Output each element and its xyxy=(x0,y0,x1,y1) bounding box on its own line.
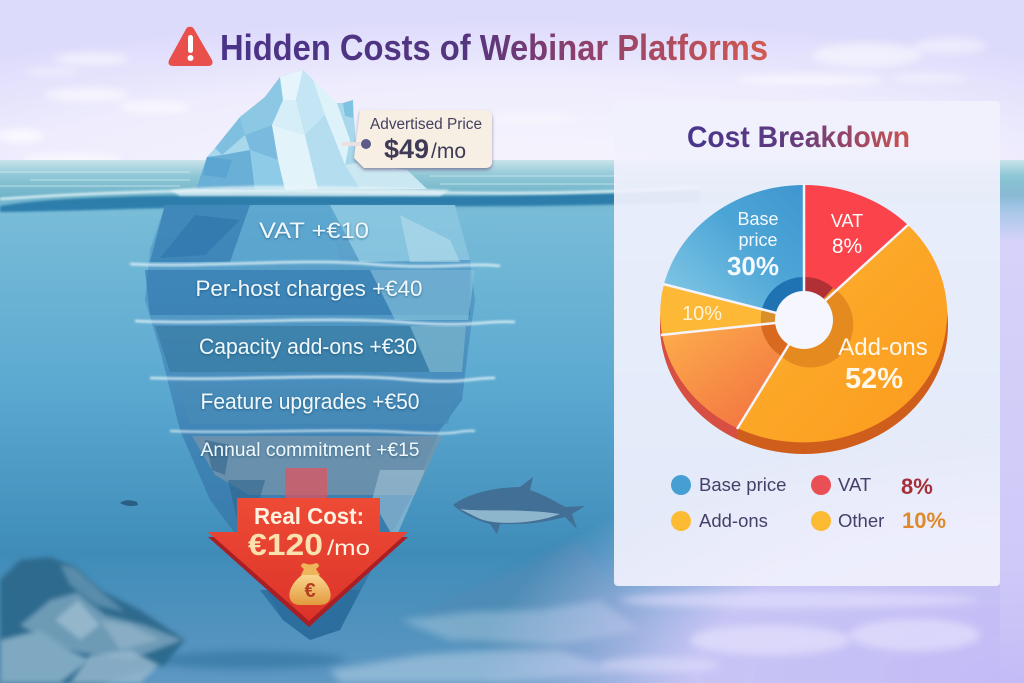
slice label: other: 10% xyxy=(682,303,722,325)
slice label: VAT xyxy=(831,211,863,258)
slice dividers xyxy=(661,184,909,429)
small fish xyxy=(120,500,138,506)
legend item: other xyxy=(811,510,884,531)
legend xyxy=(671,474,946,533)
slice: base price xyxy=(664,185,804,320)
slice label: add-ons: Add-ons xyxy=(838,334,928,361)
slice label: add-ons: 52% xyxy=(845,363,903,395)
slice label: VAT: 8% xyxy=(832,235,862,258)
layer: feature upgrades: Feature upgrades +€50 xyxy=(200,389,420,414)
slice label: VAT: VAT xyxy=(831,211,863,231)
background: sea xyxy=(0,160,1024,683)
pie chart xyxy=(660,184,948,454)
price tag xyxy=(342,110,492,168)
arrow: real cost xyxy=(208,468,408,627)
icon: money bag xyxy=(289,563,331,605)
slice label: base price: 30% xyxy=(727,251,779,281)
icon: money bag: € xyxy=(304,580,316,602)
arrow amount: €120 xyxy=(248,527,323,562)
slice label: add-ons xyxy=(838,334,928,395)
background: sky xyxy=(0,0,1024,200)
inner ring xyxy=(761,277,853,368)
price tag: $49 xyxy=(384,134,429,164)
slice: other orange xyxy=(662,320,804,428)
slice label: base price: Base xyxy=(737,209,779,229)
slice: add-ons xyxy=(737,225,947,442)
slice label: base price xyxy=(727,209,779,281)
seabed rocks: left xyxy=(0,557,345,683)
pie depth xyxy=(660,196,948,454)
legend value: other: 10% xyxy=(902,508,946,533)
legend item: VAT: VAT xyxy=(838,474,871,495)
background: lavender fade xyxy=(380,380,1024,683)
legend item: base price: Base price xyxy=(699,474,786,495)
slice: VAT xyxy=(804,185,908,320)
layer: per-host charges: Per-host charges +€40 xyxy=(196,276,422,301)
price tag: Advertised Price xyxy=(370,116,482,133)
background: lower clouds xyxy=(600,592,980,673)
seabed rocks: right xyxy=(330,540,650,683)
legend item: VAT xyxy=(811,474,871,495)
layer: VAT: VAT +€10 xyxy=(259,218,369,243)
background: waterline xyxy=(0,172,700,212)
arrow unit: /mo xyxy=(327,537,370,560)
slice label: base price: price xyxy=(738,230,778,250)
iceberg cost layers xyxy=(196,218,422,461)
shark xyxy=(453,477,585,534)
layer: capacity add-ons: Capacity add-ons +€30 xyxy=(199,334,417,359)
panel: cost breakdown xyxy=(614,101,1000,586)
title: Hidden Costs of Webinar Platforms xyxy=(220,27,768,68)
layer: annual commitment: Annual commitment +€15 xyxy=(200,440,420,461)
legend item: other: Other xyxy=(838,510,884,531)
price tag: /mo xyxy=(431,140,466,163)
panel heading: Cost Breakdown xyxy=(687,121,910,154)
arrow label: Real Cost: xyxy=(254,503,364,529)
icon: warning triangle xyxy=(168,27,212,66)
background: right edge fade xyxy=(1000,180,1024,683)
legend item: add-ons: Add-ons xyxy=(699,510,768,531)
pie hole xyxy=(775,291,833,349)
iceberg underwater xyxy=(130,205,515,640)
slice: other yellow xyxy=(660,284,804,334)
iceberg tip xyxy=(170,70,450,196)
background: clouds xyxy=(0,38,986,166)
legend value: VAT: 8% xyxy=(901,474,933,499)
